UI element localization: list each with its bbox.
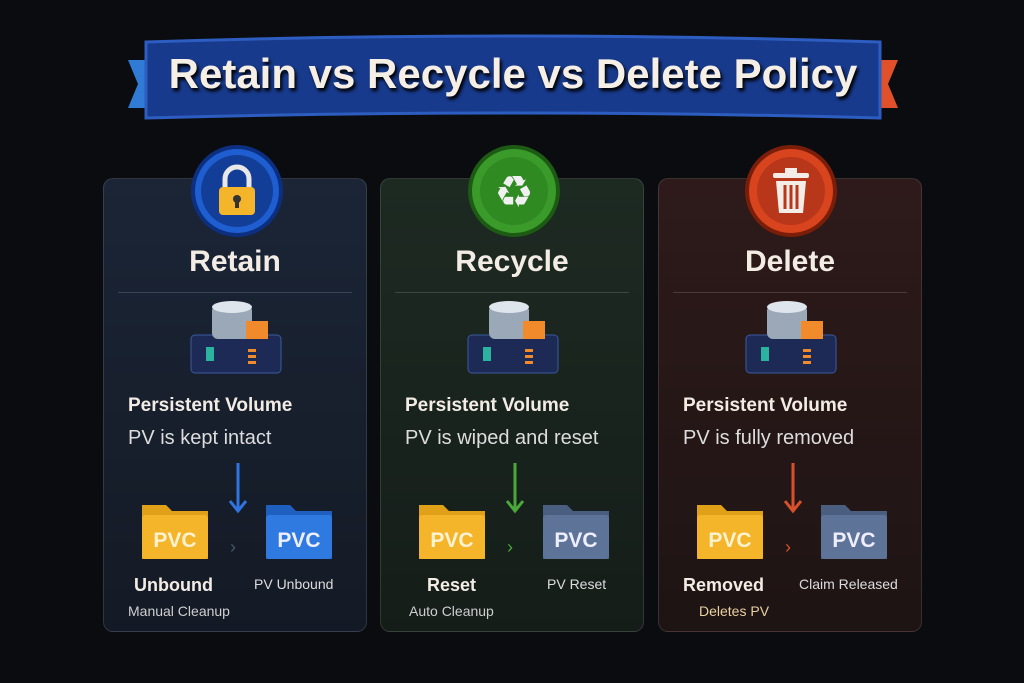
text: Persistent Volume: Persistent Volume	[405, 395, 569, 416]
icon: server	[190, 301, 282, 374]
text: PV is wiped and reset: PV is wiped and reset	[405, 427, 598, 449]
panel: Retain: ›	[230, 537, 236, 557]
label: Claim Released: Claim Released	[799, 576, 898, 592]
icon: recycle	[468, 145, 560, 237]
text: PV is fully removed: PV is fully removed	[683, 427, 854, 449]
label: Reset: Reset	[427, 575, 476, 595]
label: Unbound: Unbound	[134, 575, 213, 595]
icon: server	[746, 301, 836, 374]
icon: PVC folder yellow	[419, 505, 485, 559]
label: Deletes PV: Deletes PV	[699, 603, 769, 619]
icon: PVC folder yellow	[142, 505, 208, 559]
icon: server	[468, 301, 558, 374]
icon: PVC folder blue: PVC	[277, 529, 321, 552]
icon: PVC folder blue	[266, 505, 332, 559]
text: Persistent Volume: Persistent Volume	[128, 395, 292, 416]
label: Auto Cleanup: Auto Cleanup	[409, 603, 494, 619]
icon: PVC folder gray	[543, 505, 609, 559]
heading: Delete: Delete	[745, 245, 835, 278]
label: Removed: Removed	[683, 575, 764, 595]
title banner: Retain vs Recycle vs Delete Policy	[169, 50, 857, 97]
panel: Delete	[658, 178, 922, 632]
icon: trash	[745, 145, 837, 237]
title banner	[128, 34, 898, 120]
label: PV Reset: PV Reset	[547, 576, 606, 592]
icon: lock	[191, 145, 283, 237]
icon: PVC folder yellow	[697, 505, 763, 559]
panel: Delete: ›	[785, 537, 791, 557]
icon: PVC folder gray: PVC	[832, 529, 876, 552]
text: Persistent Volume: Persistent Volume	[683, 395, 847, 416]
arrow	[784, 463, 802, 514]
heading: Retain: Retain	[189, 245, 281, 278]
icon: recycle: ♻	[494, 167, 534, 218]
label: PV Unbound: PV Unbound	[254, 576, 333, 592]
icon: PVC folder yellow: PVC	[430, 529, 474, 552]
panel: Recycle	[380, 178, 644, 632]
arrow	[228, 463, 248, 514]
icon: PVC folder gray: PVC	[554, 529, 598, 552]
heading: Recycle: Recycle	[455, 245, 569, 278]
label: Manual Cleanup: Manual Cleanup	[128, 603, 230, 619]
icon: PVC folder yellow: PVC	[153, 529, 197, 552]
icon: PVC folder gray	[821, 505, 887, 559]
text: PV is kept intact: PV is kept intact	[128, 427, 271, 449]
icon: PVC folder yellow: PVC	[708, 529, 752, 552]
panel: Recycle: ›	[507, 537, 513, 557]
panel: Retain	[103, 178, 367, 632]
arrow	[506, 463, 524, 514]
